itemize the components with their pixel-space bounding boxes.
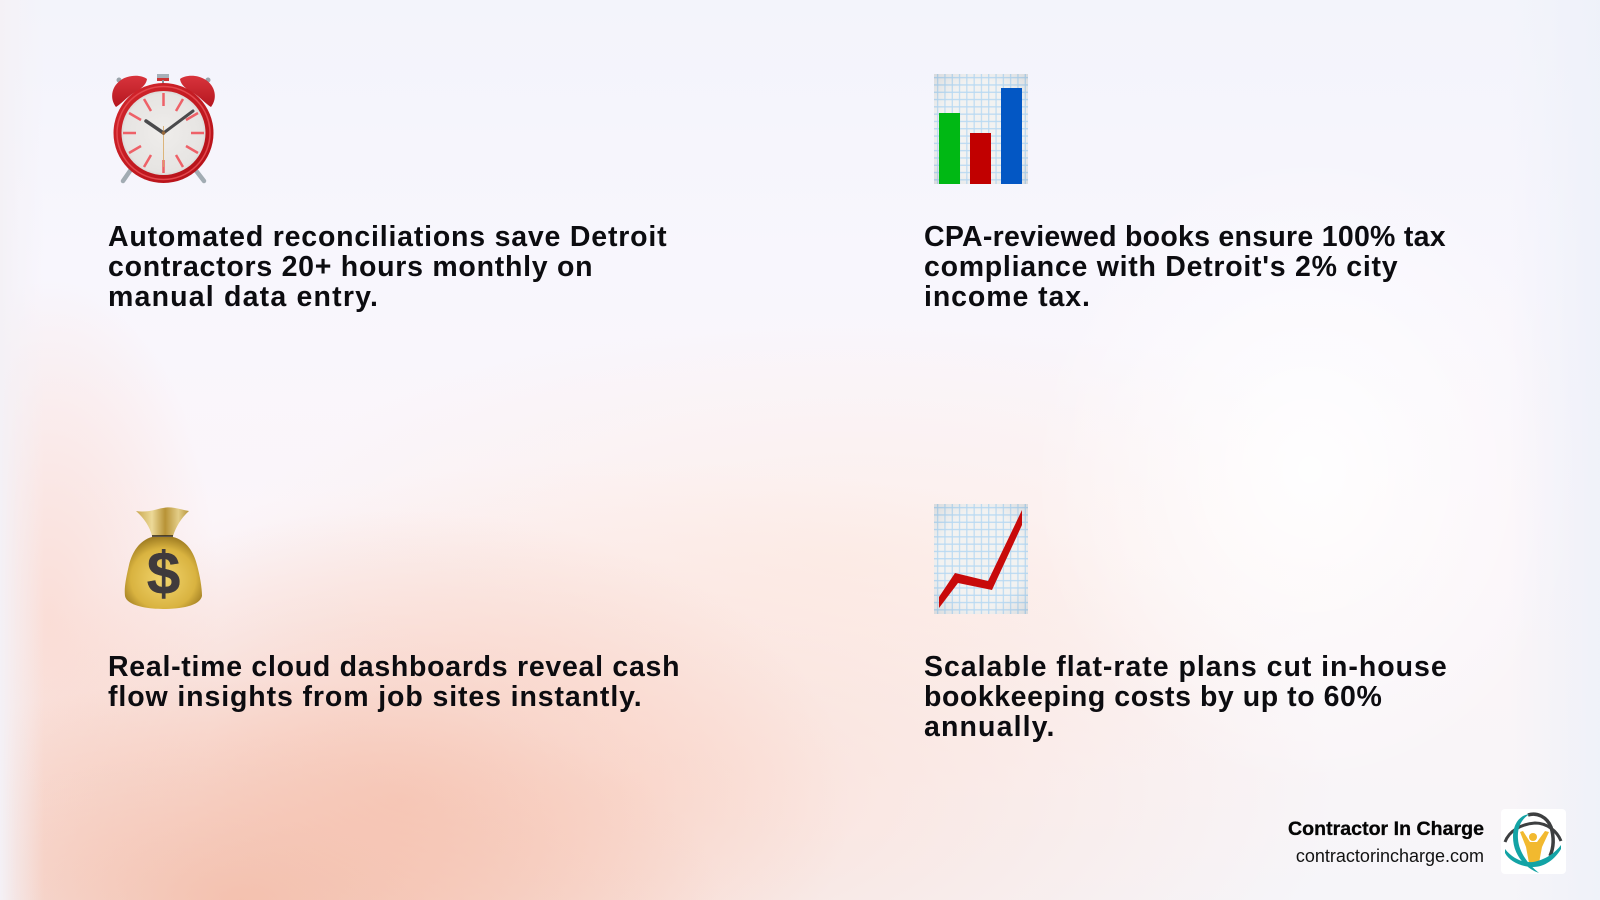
icon: money bag [124, 507, 202, 609]
text: real-time dashboards: Real-time cloud dashboards reveal cash [108, 651, 680, 683]
text: automated reconciliations: manual data entry. [108, 281, 379, 313]
icon: bar chart [934, 74, 1028, 184]
text: CPA-reviewed books: compliance with Detroit's 2% city [924, 251, 1398, 283]
text: automated reconciliations: Automated reconciliations save Detroit [108, 221, 667, 253]
text: CPA-reviewed books [924, 221, 1446, 313]
text: CPA-reviewed books: CPA-reviewed books ensure 100% tax [924, 221, 1446, 253]
text: CPA-reviewed books: income tax. [924, 281, 1091, 313]
text: automated reconciliations [108, 221, 667, 313]
text: flat-rate plans: Scalable flat-rate plans cut in-house [924, 651, 1448, 683]
text: automated reconciliations: contractors 20+ hours monthly on [108, 251, 593, 283]
icon: money bag: $ [147, 540, 180, 607]
icon: rising line chart [934, 504, 1028, 614]
text: real-time dashboards: flow insights from job sites instantly. [108, 681, 643, 713]
text: real-time dashboards [108, 651, 680, 713]
text: flat-rate plans [924, 651, 1448, 743]
text: flat-rate plans: annually. [924, 711, 1056, 743]
brand url: contractorincharge.com [1296, 846, 1484, 866]
icon: logo [1501, 809, 1566, 874]
text: flat-rate plans: bookkeeping costs by up to 60% [924, 681, 1382, 713]
brand name: Contractor In Charge [1288, 818, 1484, 840]
icon: alarm clock [112, 74, 215, 184]
